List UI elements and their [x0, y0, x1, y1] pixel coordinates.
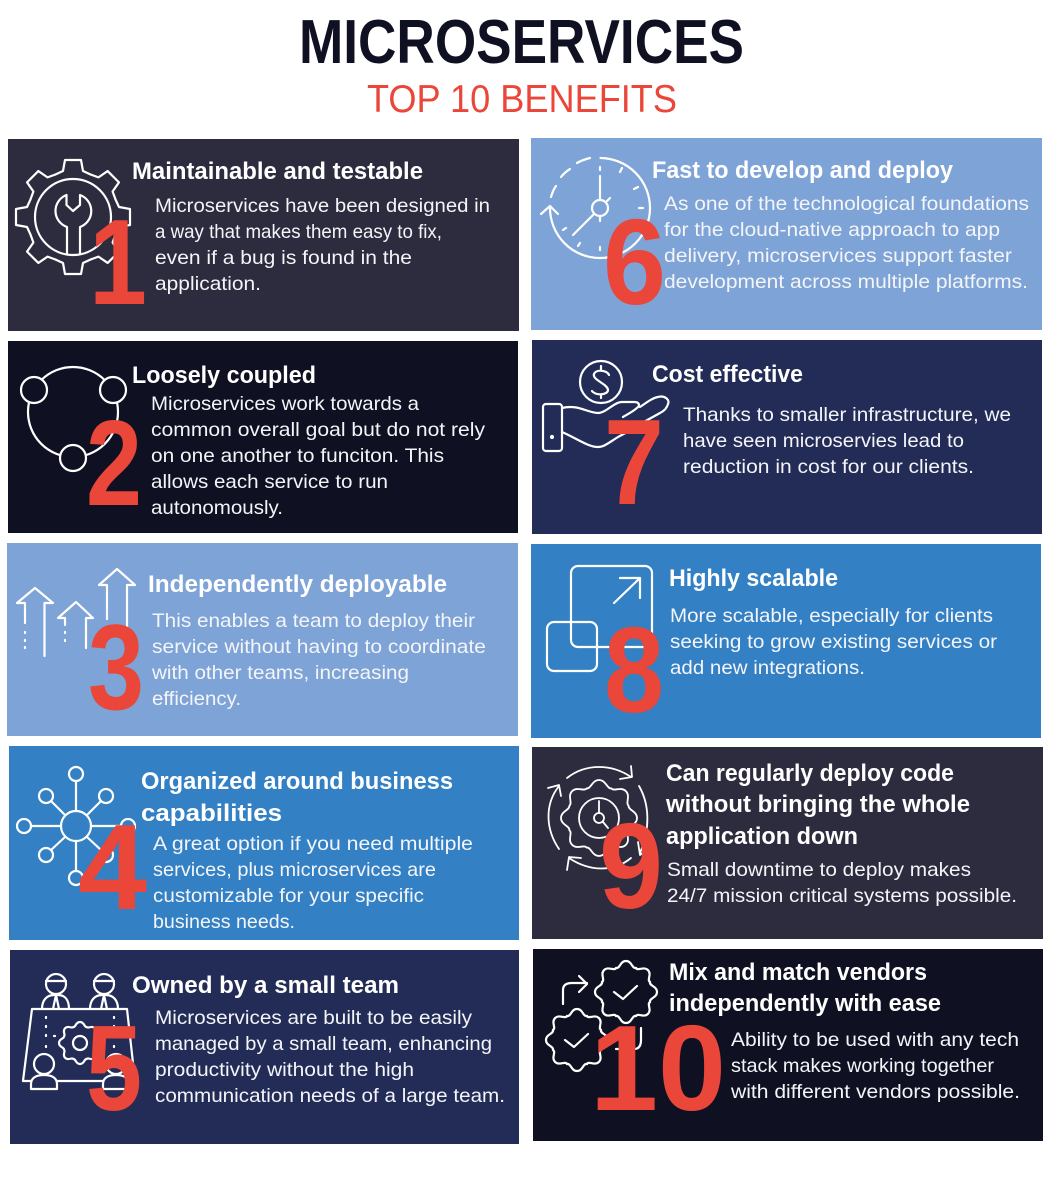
panel 7: cost effective [532, 340, 1042, 534]
body text [670, 605, 998, 679]
heading: Loosely coupled [132, 362, 316, 389]
body text [153, 833, 473, 933]
body text: Microservices work towards a [151, 393, 419, 415]
icon: hub network [17, 767, 135, 885]
body text: even if a bug is found in the [155, 247, 412, 269]
body text: Small downtime to deploy makes [667, 859, 971, 881]
body text [664, 193, 1029, 293]
body text: productivity without the high [155, 1059, 414, 1081]
body text: 24/7 mission critical systems possible. [667, 885, 1017, 907]
heading: Organized around business [141, 768, 453, 795]
panel 2: loosely coupled [8, 341, 518, 533]
icon: two check gears with arrows [546, 961, 657, 1071]
body text [155, 1007, 505, 1107]
icon: team around table [23, 974, 135, 1089]
body text [730, 1029, 1020, 1103]
panel 5: owned by a small team [10, 950, 519, 1144]
body text [151, 610, 486, 710]
heading: Independently deployable [148, 571, 447, 598]
body text: Microservices have been designed in [155, 195, 490, 217]
body text: As one of the technological foundations [664, 193, 1029, 215]
body text: Ability to be used with any tech [731, 1029, 1019, 1051]
number 5: 5 [86, 1000, 142, 1136]
body text [155, 195, 490, 295]
heading: capabilities [141, 800, 282, 827]
body text: More scalable, especially for clients [670, 605, 993, 627]
body text: communication needs of a large team. [155, 1085, 505, 1107]
number 1: 1 [89, 194, 147, 330]
body text: add new integrations. [670, 657, 865, 679]
body text: This enables a team to deploy their [152, 610, 476, 632]
panel 8: highly scalable [531, 544, 1041, 738]
number 4: 4 [78, 799, 147, 935]
body text: development across multiple platforms. [664, 271, 1028, 293]
icon: hand holding coin [543, 361, 668, 451]
icon: gear with rotating arrows [548, 766, 649, 870]
icon: scaling squares [547, 566, 652, 671]
body text: a way that makes them easy to fix, [155, 221, 442, 243]
icon: rising arrows [17, 569, 135, 656]
panel 1: maintainable and testable [8, 139, 519, 331]
body text: services, plus microservices are [153, 859, 436, 881]
icon: gear with wrench [16, 160, 130, 274]
body text: allows each service to run [151, 471, 388, 493]
body text: with other teams, increasing [151, 662, 409, 684]
body text: have seen microservies lead to [683, 430, 964, 452]
heading: independently with ease [669, 990, 941, 1017]
body text: Microservices are built to be easily [155, 1007, 472, 1029]
body text: stack makes working together [731, 1055, 995, 1077]
body text: Thanks to smaller infrastructure, we [683, 404, 1011, 426]
body text: business needs. [153, 911, 295, 933]
number 6: 6 [603, 194, 666, 330]
panel 4: organized around business capabilities [9, 746, 519, 940]
heading: Can regularly deploy code [666, 760, 954, 787]
panel 6: fast to develop and deploy [531, 138, 1042, 330]
body text [667, 859, 1017, 907]
title: MICROSERVICES [299, 8, 744, 77]
heading: Mix and match vendors [669, 959, 927, 986]
heading: Maintainable and testable [132, 158, 423, 185]
panel 9: can regularly deploy code [532, 747, 1043, 939]
heading: application down [666, 823, 858, 850]
body text: common overall goal but do not rely [151, 419, 485, 441]
body text: service without having to coordinate [152, 636, 486, 658]
subtitle: TOP 10 BENEFITS [367, 78, 677, 121]
body text: autonomously. [151, 497, 283, 519]
body text [683, 404, 1011, 478]
heading [141, 768, 453, 827]
number 8: 8 [604, 602, 664, 738]
body text: seeking to grow existing services or [670, 631, 998, 653]
number 9: 9 [599, 798, 663, 934]
number 3: 3 [88, 599, 144, 735]
heading [665, 760, 970, 850]
heading: Cost effective [652, 361, 803, 388]
body text: managed by a small team, enhancing [155, 1033, 492, 1055]
body text: application. [155, 273, 261, 295]
number 7: 7 [604, 394, 664, 530]
body text: efficiency. [152, 688, 241, 710]
body text: on one another to funciton. This [151, 445, 444, 467]
body text: with different vendors possible. [730, 1081, 1020, 1103]
heading [669, 959, 941, 1017]
heading: Owned by a small team [132, 972, 399, 999]
heading: without bringing the whole [665, 791, 970, 818]
body text [151, 393, 485, 519]
icon: clock [541, 158, 650, 258]
panel 10: mix and match vendors [533, 949, 1043, 1141]
panel 3: independently deployable [7, 543, 518, 736]
body text: for the cloud-native approach to app [664, 219, 1000, 241]
number 10: 10 [590, 1000, 726, 1136]
body text: A great option if you need multiple [153, 833, 473, 855]
icon: connected circles [21, 367, 126, 471]
body text: reduction in cost for our clients. [683, 456, 974, 478]
body text: delivery, microservices support faster [664, 245, 1013, 267]
body text: customizable for your specific [153, 885, 424, 907]
heading: Highly scalable [669, 565, 838, 592]
heading: Fast to develop and deploy [652, 157, 954, 184]
number 2: 2 [86, 395, 142, 531]
